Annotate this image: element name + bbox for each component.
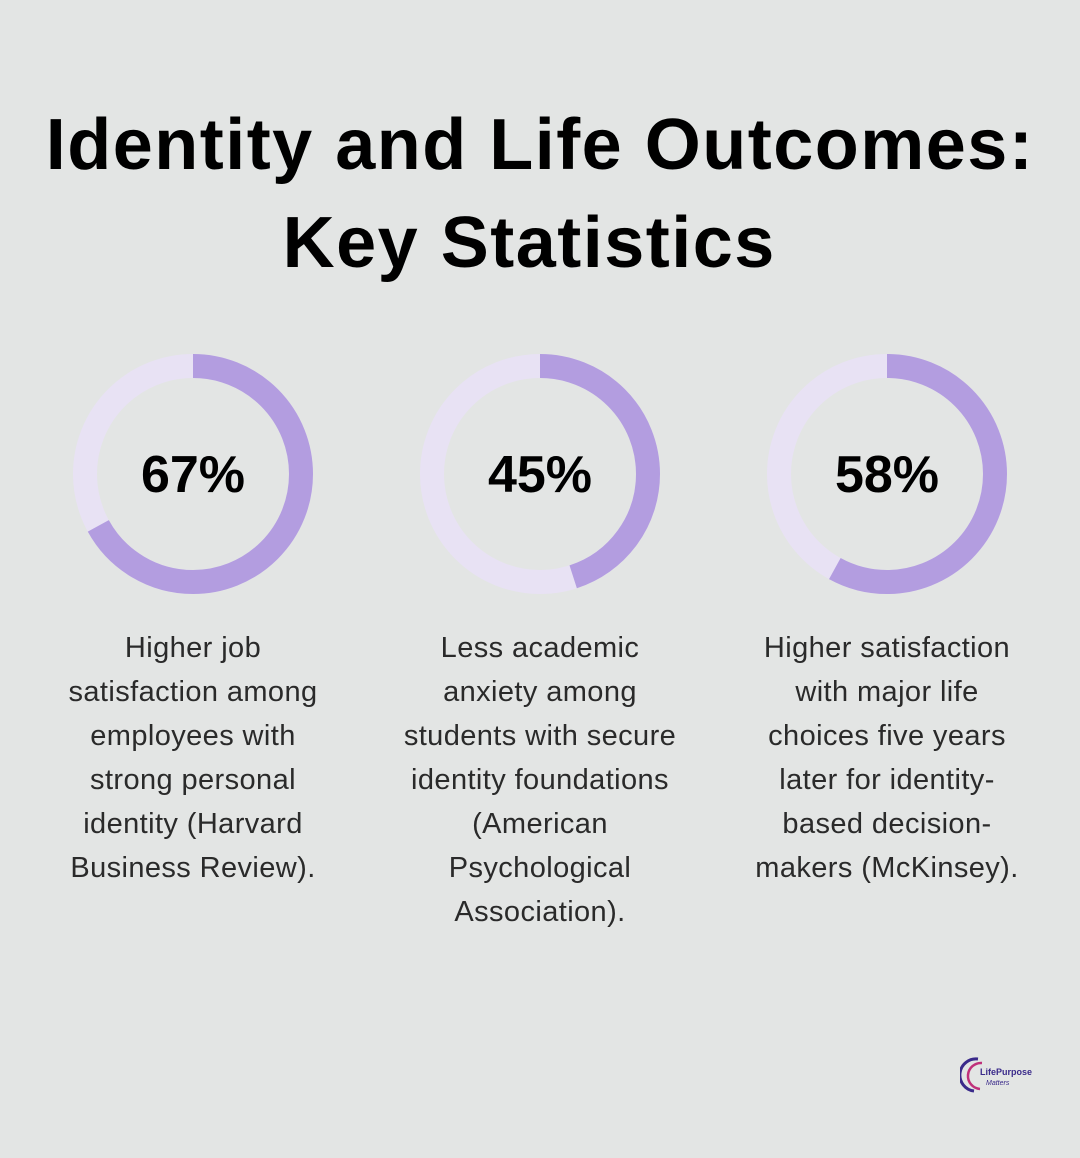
stat 3 donut bbox=[767, 354, 1007, 594]
logo bbox=[960, 1057, 1032, 1092]
title: Identity and Life Outcomes: bbox=[46, 105, 1034, 185]
stat 2 text: Less academic anxiety among students with secure identity foundations (American Psychological Association). bbox=[404, 632, 676, 928]
title: Key Statistics bbox=[283, 203, 776, 283]
logo: Matters bbox=[986, 1080, 1010, 1087]
stat 3 text: Higher satisfaction with major life choices five years later for identity-based decision-makers (McKinsey). bbox=[755, 632, 1019, 884]
stat 1 donut: 67% bbox=[141, 446, 245, 504]
title bbox=[46, 105, 1034, 283]
stat 2 donut: 45% bbox=[488, 446, 592, 504]
stat 3 donut: 58% bbox=[835, 446, 939, 504]
logo: LifePurpose bbox=[980, 1067, 1032, 1077]
stat 2 donut bbox=[420, 354, 660, 594]
stat 1 donut bbox=[73, 354, 313, 594]
stat 1 text: Higher job satisfaction among employees with strong personal identity (Harvard Business Review). bbox=[68, 632, 318, 884]
